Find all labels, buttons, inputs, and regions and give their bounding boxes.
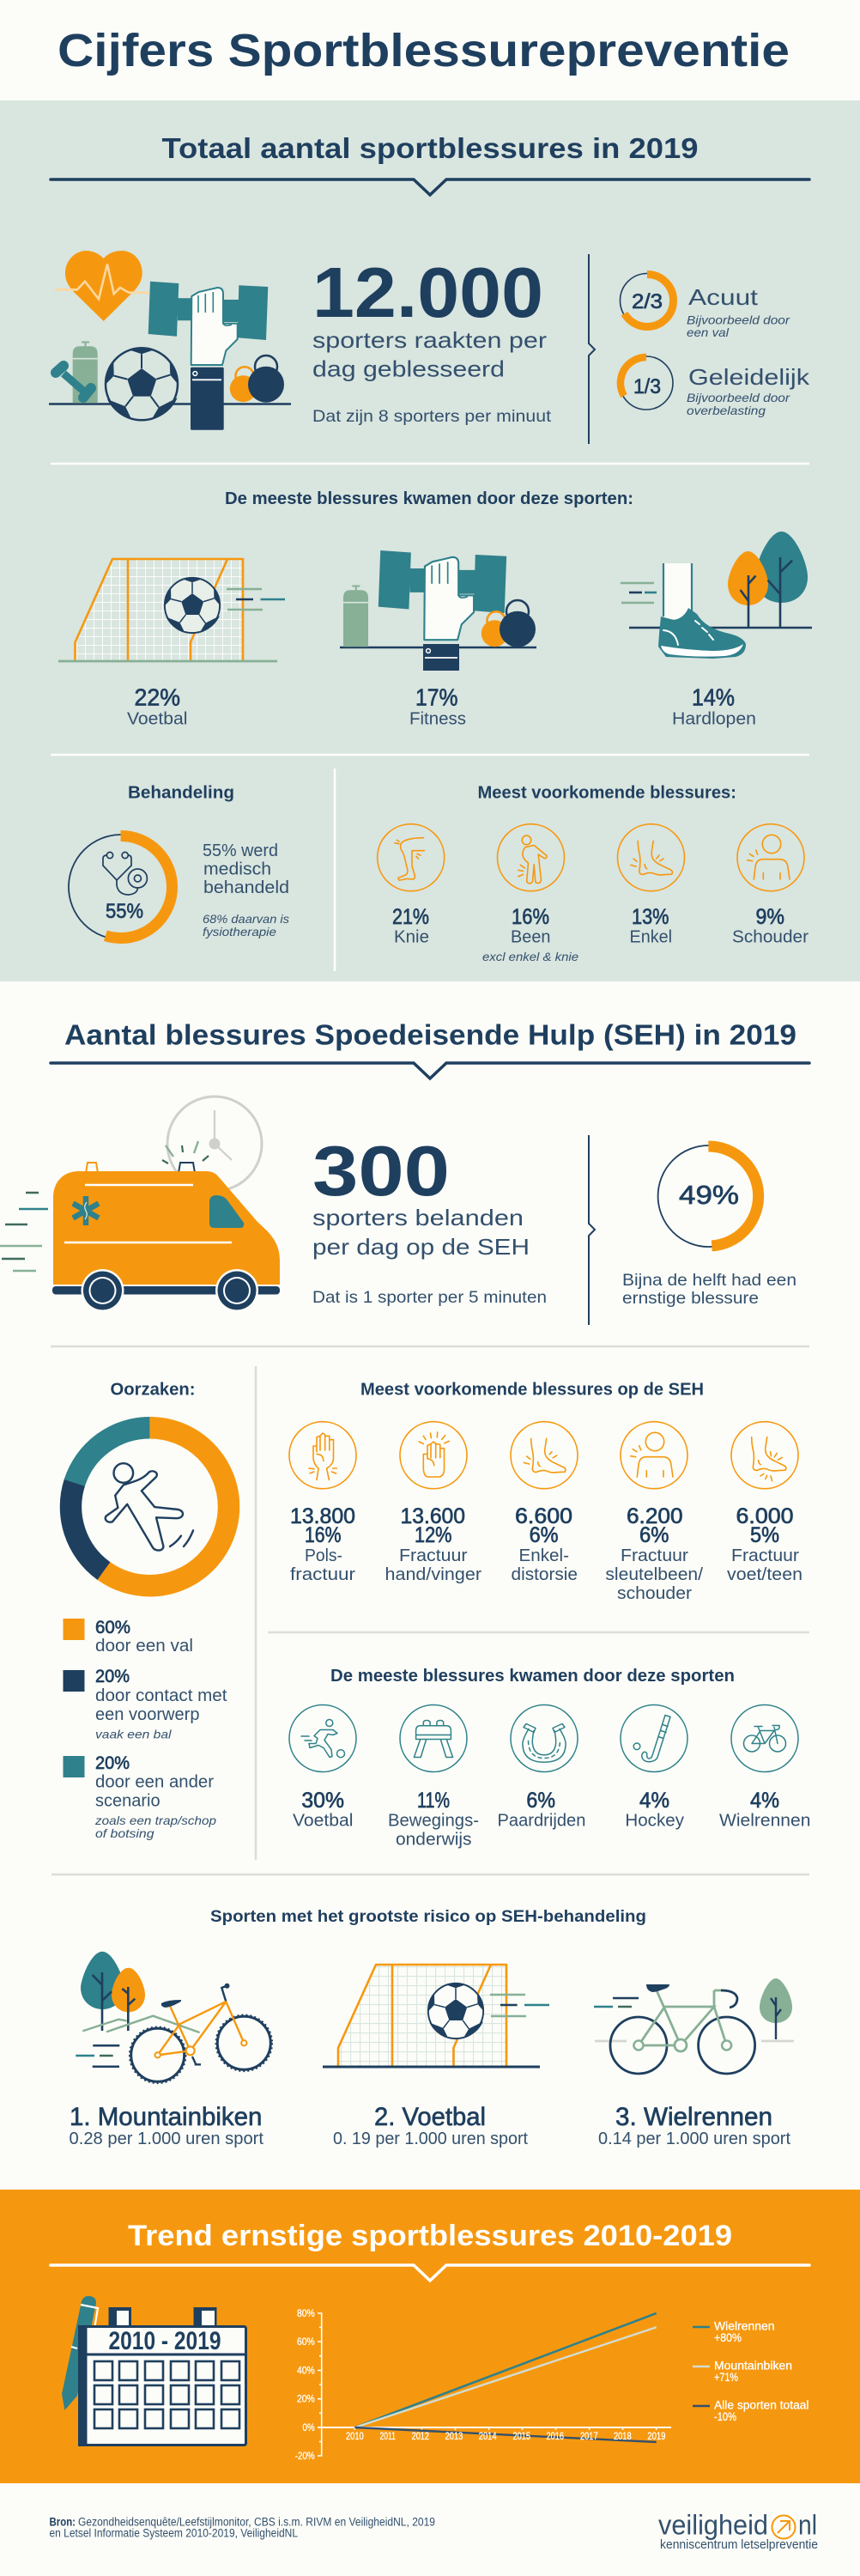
label: 1. mountainbiken: 0.28 per 1.000 uren sport: [69, 2129, 263, 2148]
source note: Gezondheidsenquête/Leefstijlmonitor, CBS i.s.m. RIVM en VeiligheidNL, 2019: [78, 2516, 435, 2529]
icon: falling person: [106, 1463, 193, 1551]
label: 21% knie: 21%: [392, 905, 429, 929]
donut: 55% medisch behandeld: 55%: [106, 900, 143, 923]
donut: 49% ernstige blessure: 49%: [679, 1180, 739, 1210]
text: bijna de helft: Bijna de helft had een: [622, 1271, 796, 1290]
icon: fractuur sleutelbeen: [621, 1422, 687, 1489]
panel: totaal aantal sportblessures: [0, 100, 860, 981]
label: 9% schouder: 9%: [755, 905, 784, 929]
label: polsfractuur: 13.800: [290, 1504, 355, 1528]
key figure 300: 300: [312, 1131, 450, 1211]
legend: mountainbiken: Mountainbiken: [714, 2359, 792, 2372]
label: 1. mountainbiken: [69, 2103, 263, 2148]
label: polsfractuur: [290, 1504, 355, 1584]
series: wielrennen: [354, 2313, 657, 2427]
text: bijna de helft: ernstige blessure: [622, 1289, 759, 1308]
heading: totaal aantal sportblessures: Totaal aantal sportblessures in 2019: [161, 132, 699, 164]
title: Cijfers Sportblessurepreventie: [58, 25, 790, 76]
illustration: mountainbike: [76, 1952, 272, 2083]
series: alle sporten totaal: [354, 2427, 657, 2442]
legend: 20% ander scenario: of botsing: [95, 1826, 154, 1840]
donut: 49% ernstige blessure: [658, 1145, 760, 1247]
y axis labels: -20%: [295, 2451, 315, 2462]
label: 16% been: [482, 905, 578, 963]
legend: 20% ander scenario: [64, 1753, 216, 1840]
y axis labels: 20%: [297, 2395, 315, 2405]
y axis labels: [295, 2309, 315, 2462]
logo: veiligheid.nl: [658, 2510, 818, 2552]
panel: meeste blessures SEH per sport: [289, 1667, 810, 1850]
text: 1 sporter per 5 minuten: Dat is 1 sporter per 5 minuten: [312, 1288, 547, 1307]
x axis labels: 2017: [580, 2432, 598, 2442]
label: 4% wielrennen: [719, 1789, 810, 1831]
label: 11% bewegingsonderwijs: onderwijs: [396, 1831, 472, 1850]
text: sporters belanden per dag op de SEH: per dag op de SEH: [312, 1234, 530, 1260]
text: geleidelijk: Geleidelijk: [688, 364, 810, 390]
label: 9% schouder: [732, 905, 809, 946]
text: 55% werd medisch behandeld: fysiotherapie: [203, 925, 276, 939]
legend: 20% ander scenario: scenario: [95, 1792, 160, 1811]
label: 17% fitness: 17%: [415, 683, 458, 711]
label: 1. mountainbiken: 1. Mountainbiken: [70, 2103, 262, 2131]
text: sporters raakten per dag: [312, 327, 547, 381]
x axis labels: 2010: [346, 2432, 364, 2442]
heading rule with arrow: [51, 2265, 809, 2281]
legend: 20% door contact: een voorwerp: [95, 1705, 199, 1724]
label: 11% bewegingsonderwijs: 11%: [417, 1789, 450, 1813]
label: fractuur sleutelbeen: Fractuur: [621, 1546, 688, 1565]
icon: calendar with pen: [62, 2296, 247, 2446]
label: fractuur hand/vinger: 13.600: [400, 1504, 465, 1528]
icon: polsfractuur: [289, 1422, 356, 1489]
heading rule with arrow: [51, 1063, 809, 1078]
vertical divider with notch: [589, 254, 595, 444]
heading: behandeling: Behandeling: [128, 783, 234, 802]
label: 4% hockey: [625, 1789, 684, 1831]
icon: turnpaard: [400, 1705, 467, 1772]
label: fractuur voet/teen: voet/teen: [727, 1565, 802, 1584]
label: 6% paardrijden: Paardrijden: [498, 1812, 585, 1831]
icon: schouder: [737, 824, 804, 891]
source note: en Letsel Informatie Systeem 2010-2019, VeiligheidNL: [50, 2527, 298, 2540]
legend: alle sporten totaal: Alle sporten totaal: [714, 2398, 809, 2412]
subheading: meeste blessures door sporten: De meeste blessures kwamen door deze sporten:: [225, 489, 633, 508]
x axis labels: 2014: [479, 2432, 497, 2442]
panel: meest voorkomende blessures op de SEH: [289, 1381, 802, 1603]
label: 21% knie: Knie: [394, 927, 429, 946]
label: fractuur voet/teen: [727, 1504, 802, 1584]
text: 55% werd medisch behandeld: 55% werd: [203, 841, 278, 860]
label: 4% wielrennen: Wielrennen: [719, 1812, 810, 1831]
label: fractuur sleutelbeen: [605, 1504, 703, 1603]
label: fractuur voet/teen: 6.000: [736, 1504, 793, 1528]
illustration: hardlopen: [621, 532, 812, 659]
legend: wielrennen: [693, 2319, 774, 2344]
label: enkeldistorsie: 6.600: [515, 1504, 572, 1528]
legend: 60% door een val: [64, 1618, 193, 1656]
icon: fractuur hand: [400, 1422, 467, 1489]
label: 30% voetbal: Voetbal: [293, 1812, 354, 1831]
label: 4% hockey: Hockey: [625, 1812, 684, 1831]
label: 13% enkel: 13%: [632, 905, 669, 929]
label: 11% bewegingsonderwijs: [388, 1789, 479, 1850]
label: 3. wielrennen: [598, 2103, 790, 2148]
key figure 12.000: 12.000: [312, 252, 543, 332]
label: 16% been: Been: [511, 927, 551, 946]
x axis labels: [346, 2432, 665, 2442]
text: geleidelijk: overbelasting: [687, 404, 766, 417]
text: geleidelijk: Bijvoorbeeld door: [687, 391, 790, 404]
legend: 20% ander scenario: 20%: [95, 1753, 130, 1773]
label: 6% paardrijden: 6%: [526, 1789, 555, 1813]
label: fractuur hand/vinger: hand/vinger: [385, 1565, 481, 1584]
icon: star of life: [73, 1196, 99, 1225]
label: enkeldistorsie: distorsie: [512, 1565, 578, 1584]
x axis labels: 2018: [614, 2432, 632, 2442]
heading: sporten SEH: De meeste blessures kwamen door deze sporten: [330, 1667, 735, 1686]
icon: fractuur voet: [731, 1422, 798, 1489]
legend: 60% door een val: 60%: [95, 1618, 130, 1637]
label: 14% hardlopen: 14%: [692, 683, 735, 711]
legend: 20% ander scenario: door een ander: [95, 1773, 214, 1792]
label: enkeldistorsie: [512, 1504, 578, 1584]
illustration: voetbal goal: [323, 1965, 549, 2067]
panel: grootste risico op SEH-behandeling: [69, 1907, 794, 2148]
icon: been: [498, 824, 565, 891]
heading: blessures op de SEH: Meest voorkomende blessures op de SEH: [360, 1381, 704, 1400]
x axis labels: 2011: [379, 2432, 396, 2442]
illustration: fitness: [340, 550, 536, 671]
label: fractuur voet/teen: 5%: [750, 1523, 779, 1547]
legend: 20% ander scenario: zoals een trap/schop: [94, 1814, 216, 1827]
donut: 2/3 acuut: 2/3: [632, 290, 663, 313]
source note: [50, 2516, 435, 2540]
panel: trend ernstige sportblessures: [0, 2190, 860, 2483]
heading: meest voorkomende blessures: Meest voorkomende blessures:: [477, 783, 736, 802]
y axis labels: 40%: [297, 2366, 315, 2377]
legend: mountainbiken: [693, 2359, 792, 2384]
label: 14% hardlopen: [672, 683, 756, 729]
label: 13% enkel: Enkel: [630, 927, 672, 946]
text: sporters belanden per dag op de SEH: [312, 1205, 530, 1260]
donut: 2/3 acuut: [620, 273, 675, 328]
illustration: ambulance with clock: [0, 1097, 280, 1312]
illustration: racefiets: [594, 1978, 794, 2074]
legend: alle sporten totaal: [693, 2398, 809, 2423]
panel: oorzaken: [39, 1381, 260, 1840]
legend: alle sporten totaal: -10%: [714, 2409, 736, 2423]
heading: oorzaken: Oorzaken:: [110, 1381, 196, 1400]
label: 17% fitness: [409, 683, 466, 729]
donut: 1/3 geleidelijk: [611, 348, 681, 418]
icon: calendar with pen: 2010 - 2019: [108, 2327, 221, 2355]
text: sporters raakten per dag: dag geblesseerd: [312, 355, 505, 381]
donut: 1/3 geleidelijk: 1/3: [633, 375, 661, 398]
legend: 20% door contact: [64, 1667, 227, 1741]
label: enkeldistorsie: 6%: [530, 1523, 559, 1547]
label: polsfractuur: fractuur: [290, 1565, 355, 1584]
icon: fiets: [731, 1705, 798, 1772]
icon: voetballer: [289, 1705, 356, 1772]
source note: Bron:: [50, 2516, 76, 2529]
label: 16% been: 16%: [512, 905, 549, 929]
label: 2. voetbal: [333, 2103, 528, 2148]
text: 55% werd medisch behandeld: medisch: [203, 860, 271, 879]
label: fractuur sleutelbeen: 6%: [639, 1523, 669, 1547]
logo: veiligheid.nl: nl: [798, 2510, 817, 2541]
legend: 20% door contact: 20%: [95, 1667, 130, 1686]
legend: wielrennen: Wielrennen: [714, 2319, 774, 2333]
label: 17% fitness: Fitness: [409, 710, 466, 729]
label: 16% been: excl enkel & knie: [482, 950, 578, 963]
label: fractuur sleutelbeen: schouder: [617, 1584, 692, 1603]
donut chart: oorzaken: [39, 1396, 260, 1617]
icon: enkeldistorsie: [511, 1422, 578, 1489]
label: 30% voetbal: 30%: [301, 1789, 344, 1813]
label: fractuur voet/teen: Fractuur: [731, 1546, 799, 1565]
label: 22% voetbal: [127, 683, 187, 729]
label: 22% voetbal: 22%: [134, 683, 180, 711]
logo: veiligheid.nl: veiligheid: [658, 2510, 768, 2541]
label: 13% enkel: [630, 905, 672, 946]
heading: blessures spoedeisende hulp: Aantal blessures Spoedeisende Hulp (SEH) in 2019: [64, 1019, 796, 1051]
label: 3. wielrennen: 0.14 per 1.000 uren sport: [598, 2129, 790, 2148]
donut: 55% medisch behandeld: [69, 835, 173, 939]
text: 55% werd medisch behandeld: [203, 841, 289, 939]
x axis labels: 2012: [412, 2432, 429, 2442]
label: 14% hardlopen: Hardlopen: [672, 710, 756, 729]
label: 30% voetbal: [293, 1789, 354, 1831]
label: 4% wielrennen: 4%: [750, 1789, 779, 1813]
heading rule with arrow: [51, 179, 809, 195]
y axis labels: 60%: [297, 2337, 315, 2348]
x axis labels: 2013: [445, 2432, 463, 2442]
legend: 20% door contact: door contact met: [95, 1686, 227, 1705]
label: fractuur hand/vinger: 12%: [415, 1523, 451, 1547]
label: polsfractuur: 16%: [305, 1523, 342, 1547]
label: polsfractuur: Pols-: [305, 1546, 342, 1565]
label: fractuur sleutelbeen: 6.200: [627, 1504, 683, 1528]
series: mountainbiken: [354, 2327, 657, 2427]
x axis labels: 2015: [513, 2432, 530, 2442]
label: enkeldistorsie: Enkel-: [518, 1546, 569, 1565]
y axis labels: 0%: [302, 2423, 315, 2433]
text: 55% werd medisch behandeld: behandeld: [203, 878, 289, 897]
text: sporters belanden per dag op de SEH: sporters belanden: [312, 1205, 524, 1230]
label: 11% bewegingsonderwijs: Bewegings-: [388, 1812, 479, 1831]
label: 2. voetbal: 0. 19 per 1.000 uren sport: [333, 2129, 528, 2148]
label: 3. wielrennen: 3. Wielrennen: [615, 2103, 772, 2131]
icon: stethoscope: [103, 852, 147, 895]
label: 4% hockey: 4%: [639, 1789, 669, 1813]
label: fractuur hand/vinger: Fractuur: [399, 1546, 468, 1565]
x axis labels: 2019: [647, 2432, 665, 2442]
label: 6% paardrijden: [498, 1789, 585, 1831]
label: 22% voetbal: Voetbal: [127, 710, 187, 729]
heading: trend: Trend ernstige sportblessures 2010-2019: [128, 2220, 732, 2252]
illustration: voetbal goal: [58, 559, 285, 661]
text: acuut: Acuut: [688, 284, 759, 310]
legend: mountainbiken: +71%: [714, 2370, 738, 2384]
label: fractuur hand/vinger: [385, 1504, 481, 1584]
label: 21% knie: [392, 905, 429, 946]
legend: 20% door contact: vaak een bal: [95, 1728, 172, 1741]
text: sporters raakten per dag: sporters raakten per: [312, 327, 547, 353]
text: geleidelijk: [687, 364, 810, 417]
icon: hockeystick: [621, 1705, 687, 1772]
text: 55% werd medisch behandeld: 68% daarvan is: [203, 912, 289, 926]
text: acuut: een val: [687, 325, 730, 339]
heading: grootste risico: Sporten met het grootste risico op SEH-behandeling: [210, 1907, 646, 1926]
x axis labels: 2016: [546, 2432, 564, 2442]
label: fractuur sleutelbeen: sleutelbeen/: [605, 1565, 703, 1584]
icon: enkel: [618, 824, 685, 891]
y axis labels: 80%: [297, 2309, 315, 2319]
icon: knie: [378, 824, 445, 891]
legend: wielrennen: +80%: [714, 2330, 742, 2344]
text: acuut: [687, 284, 790, 339]
text: bijna de helft: [622, 1271, 796, 1308]
vertical divider with notch: [589, 1135, 595, 1325]
logo: veiligheid.nl: kenniscentrum letselpreventie: [660, 2537, 818, 2552]
line chart: trend 2010-2019: [295, 2309, 809, 2462]
label: 9% schouder: Schouder: [732, 927, 809, 946]
legend: 60% door een val: door een val: [95, 1637, 193, 1656]
label: 2. voetbal: 2. Voetbal: [374, 2103, 486, 2131]
text: acuut: Bijvoorbeeld door: [687, 313, 790, 326]
illustration: heart and fitness shelf: [49, 251, 291, 430]
text: 8 sporters per minuut: Dat zijn 8 sporters per minuut: [312, 407, 552, 426]
icon: hoefijzer: [511, 1705, 578, 1772]
